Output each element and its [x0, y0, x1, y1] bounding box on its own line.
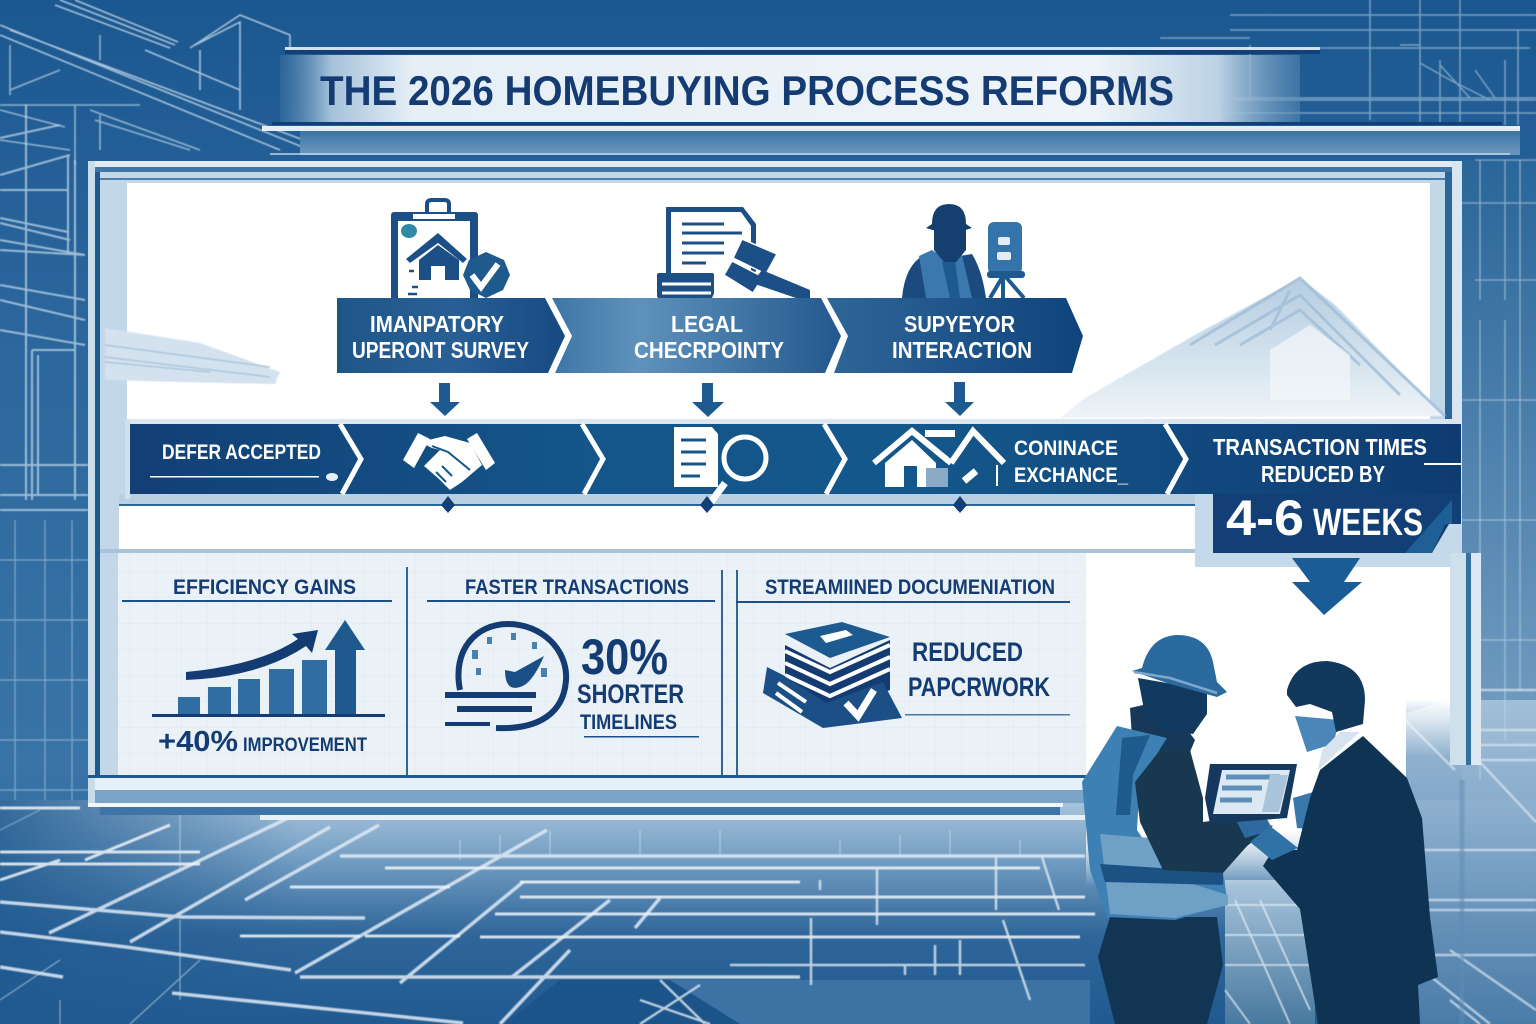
icon: clipboard with house and shield — [391, 200, 510, 302]
step: offer accepted — [150, 441, 338, 481]
step: legal checkpoint: LEGAL — [671, 311, 743, 337]
head — [1138, 678, 1207, 734]
people with tablet — [1082, 635, 1438, 1024]
step: contract exchange — [1014, 437, 1128, 487]
step: surveyor interaction — [827, 298, 1083, 373]
icon: document and magnifier — [674, 427, 766, 506]
bar chart with arrows — [152, 620, 385, 717]
panel: faster transactions — [427, 576, 715, 738]
arrow: down 2 — [692, 383, 724, 417]
panel: streamlined documentation: PAPCRWORK — [908, 672, 1050, 702]
main frame — [88, 161, 1481, 887]
panel: efficiency gains: +40% — [158, 726, 238, 758]
callout: transaction times reduced — [1213, 434, 1461, 553]
panel: faster transactions: TIMELINES — [580, 711, 677, 734]
panel: streamlined documentation — [736, 576, 1070, 728]
arrow: down 3 — [945, 382, 974, 416]
callout: transaction times reduced: 4-6 — [1226, 490, 1304, 546]
icon: legal document and gavel — [657, 207, 810, 300]
floor lines — [0, 808, 1320, 1024]
arrow: callout down — [1292, 558, 1362, 615]
upper process chevrons — [337, 298, 1083, 373]
panel: streamlined documentation: REDUCED — [912, 637, 1023, 667]
panel: faster transactions: FASTER TRANSACTIONS — [465, 576, 689, 599]
step: contract exchange: EXCHANCE_ — [1014, 464, 1128, 487]
stat panels — [118, 553, 1086, 775]
step: surveyor interaction: SUPYEYOR — [904, 311, 1015, 337]
marker diamonds — [441, 496, 967, 513]
callout: transaction times reduced: TRANSACTION TIMES — [1213, 434, 1427, 460]
icon: surveyor with total station — [902, 204, 1025, 298]
pale roof streak — [105, 328, 280, 384]
panel: streamlined documentation: STREAMIINED DOCUMENIATION — [765, 576, 1055, 599]
step: mandatory upfront survey: IMANPATORY — [370, 311, 504, 337]
step: mandatory upfront survey — [337, 298, 565, 373]
title: THE 2026 HOMEBUYING PROCESS REFORMS — [320, 67, 1174, 114]
callout: transaction times reduced: REDUCED BY — [1261, 461, 1385, 487]
step: legal checkpoint — [552, 298, 841, 373]
tablet — [1205, 764, 1297, 824]
panel: efficiency gains: EFFICIENCY GAINS — [173, 576, 356, 599]
panel: faster transactions: 30% — [581, 629, 668, 685]
panel: efficiency gains — [122, 576, 392, 758]
lower process chevrons — [125, 419, 1462, 513]
step: offer accepted: DEFER ACCEPTED — [162, 441, 321, 464]
icon: houses and keys — [874, 430, 1004, 487]
step: legal checkpoint: CHECRPOINTY — [634, 337, 784, 363]
hard hat — [1132, 635, 1227, 697]
title banner — [262, 47, 1520, 155]
step: surveyor interaction: INTERACTION — [892, 337, 1032, 363]
worker in hi-vis vest — [1082, 635, 1273, 1024]
step: mandatory upfront survey: UPERONT SURVEY — [352, 337, 529, 363]
callout: transaction times reduced: WEEKS — [1313, 502, 1423, 544]
icon: handshake — [403, 433, 495, 490]
hand — [1233, 810, 1273, 838]
icon: speedometer — [445, 624, 566, 728]
panel: efficiency gains: IMPROVEMENT — [243, 735, 367, 756]
businessman in suit — [1250, 661, 1438, 1024]
arrow: down 1 — [430, 383, 460, 416]
panel: faster transactions: SHORTER — [577, 679, 684, 709]
step: contract exchange: CONINACE — [1014, 437, 1118, 460]
icon: document stack with check — [763, 622, 902, 728]
pale house sketch — [105, 278, 1445, 418]
